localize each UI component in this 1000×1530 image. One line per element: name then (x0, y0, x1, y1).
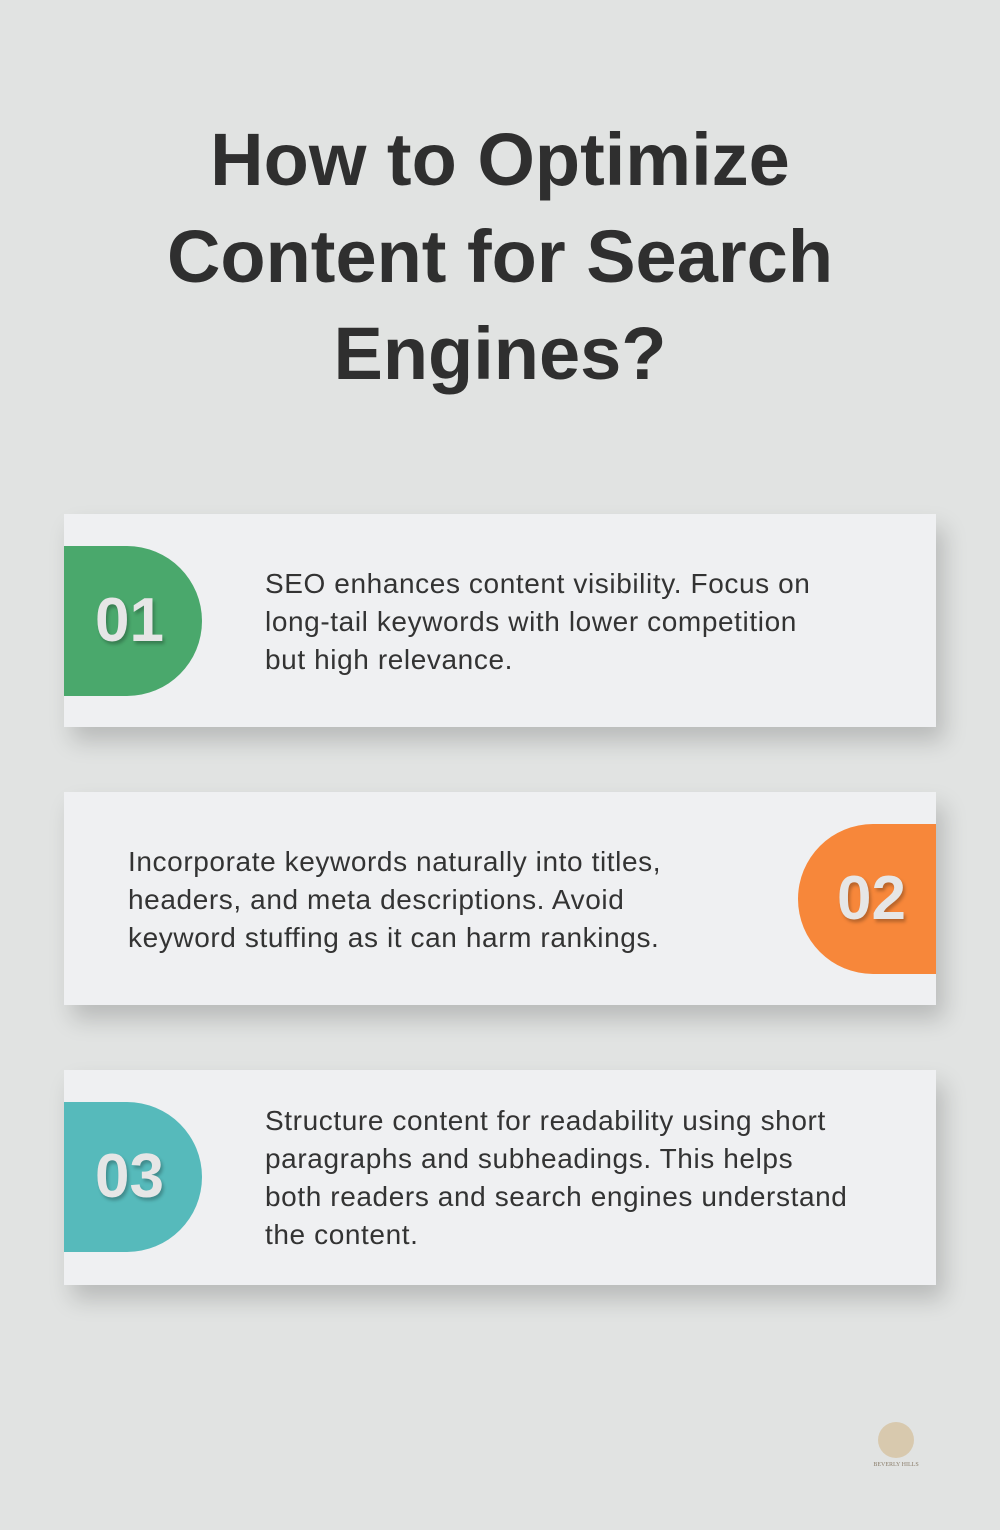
text 03: both readers and search engines understand (265, 1181, 847, 1212)
text 01: but high relevance. (265, 644, 513, 675)
title: Content for Search (167, 215, 833, 298)
title: How to Optimize (210, 118, 790, 201)
text 01: SEO enhances content visibility. Focus on (265, 568, 810, 599)
text 02: Incorporate keywords naturally into titles, (128, 846, 661, 877)
text 03: paragraphs and subheadings. This helps (265, 1143, 793, 1174)
badge 01: 01 (95, 586, 164, 655)
text 01 (265, 568, 810, 675)
title: Engines? (333, 312, 667, 395)
badge 02 (798, 824, 936, 974)
title (167, 118, 833, 395)
logo (873, 1422, 919, 1468)
badge 02: 02 (837, 864, 906, 933)
badge 01 (64, 546, 202, 696)
text 03: Structure content for readability using short (265, 1105, 826, 1136)
text 02: headers, and meta descriptions. Avoid (128, 884, 624, 915)
text 01: long-tail keywords with lower competition (265, 606, 797, 637)
text 03: the content. (265, 1219, 419, 1250)
badge 03 (64, 1102, 202, 1252)
text 02: keyword stuffing as it can harm rankings. (128, 922, 659, 953)
panel: step 03 (64, 1070, 936, 1285)
panel: step 01 (64, 514, 936, 727)
panel: step 02 (64, 792, 936, 1005)
logo: BEVERLY HILLS (873, 1462, 919, 1468)
text 02 (128, 846, 661, 953)
text 03 (265, 1105, 847, 1250)
badge 03: 03 (95, 1142, 164, 1211)
